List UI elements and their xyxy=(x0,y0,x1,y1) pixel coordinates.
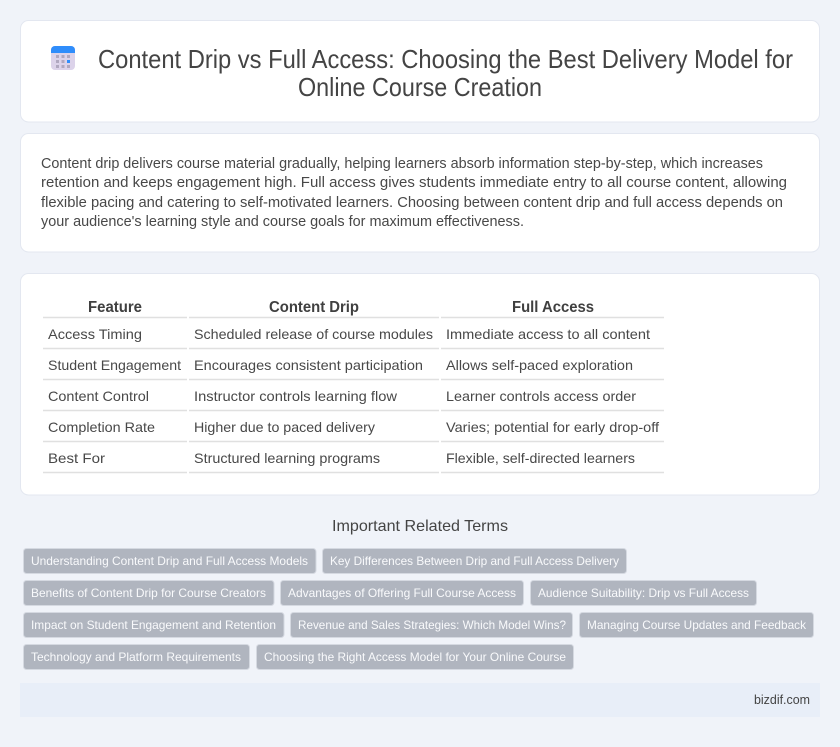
tag xyxy=(530,580,756,606)
row: student engagement: Allows self-paced exploration xyxy=(446,357,633,373)
row: access timing: Access Timing xyxy=(48,326,142,342)
tag: Choosing the Right Access Model for Your Online Course xyxy=(264,650,566,664)
tag xyxy=(322,548,626,574)
row: content control: Content Control xyxy=(48,388,149,404)
row: content control: Instructor controls learning flow xyxy=(194,388,398,404)
tag: Advantages of Offering Full Course Access xyxy=(288,586,516,600)
icon: calendar xyxy=(51,46,75,70)
tag: Revenue and Sales Strategies: Which Model Wins? xyxy=(298,618,566,632)
title: Online Course Creation xyxy=(298,74,542,102)
intro paragraph: retention and keeps engagement high. Full access gives students immediate entry to all course content, allowing xyxy=(41,175,787,191)
tag: Managing Course Updates and Feedback xyxy=(587,618,807,632)
row: best for: Structured learning programs xyxy=(194,450,380,466)
intro paragraph: flexible pacing and catering to self-motivated learners. Choosing between content drip and full access depends on xyxy=(41,195,783,211)
tag xyxy=(24,548,316,574)
tag: Key Differences Between Drip and Full Access Delivery xyxy=(330,554,619,568)
row: completion rate xyxy=(48,419,659,435)
related terms tags xyxy=(24,548,814,670)
row: student engagement: Encourages consistent participation xyxy=(194,357,423,373)
tag xyxy=(290,612,572,638)
tag xyxy=(24,580,274,606)
comparison table panel xyxy=(20,274,820,495)
row: completion rate: Varies; potential for early drop-off xyxy=(446,419,659,435)
title xyxy=(98,46,793,102)
tag xyxy=(280,580,524,606)
row: access timing: Scheduled release of course modules xyxy=(194,326,433,342)
row: student engagement xyxy=(48,357,633,373)
tag: Audience Suitability: Drip vs Full Access xyxy=(538,586,749,600)
tag: Benefits of Content Drip for Course Creators xyxy=(31,586,266,600)
tag: Technology and Platform Requirements xyxy=(31,650,241,664)
row: completion rate: Higher due to paced delivery xyxy=(194,419,375,435)
tag xyxy=(24,612,284,638)
row: content control: Learner controls access order xyxy=(446,388,636,404)
row: best for xyxy=(48,450,635,466)
row: best for: Best For xyxy=(48,450,105,466)
related terms heading: Important Related Terms xyxy=(332,518,508,535)
row: best for: Flexible, self-directed learners xyxy=(446,450,635,466)
tag: Understanding Content Drip and Full Access Models xyxy=(31,554,308,568)
tag xyxy=(24,644,250,670)
row: access timing xyxy=(48,326,650,342)
intro paragraph xyxy=(41,156,787,230)
intro text panel xyxy=(20,134,820,252)
intro paragraph: your audience's learning style and course goals for maximum effectiveness. xyxy=(41,214,524,230)
title: Content Drip vs Full Access: Choosing the Best Delivery Model for xyxy=(98,46,793,74)
row: content control xyxy=(48,388,636,404)
table header row: Content Drip xyxy=(269,299,359,316)
tag xyxy=(256,644,574,670)
tag: Impact on Student Engagement and Retention xyxy=(31,618,276,632)
table header row xyxy=(88,299,594,316)
footer source: bizdif.com xyxy=(754,692,810,707)
intro paragraph: Content drip delivers course material gradually, helping learners absorb information step-by-step, which increases xyxy=(41,156,763,172)
table header row: Feature xyxy=(88,299,142,316)
header panel xyxy=(20,20,820,122)
footer bar xyxy=(20,683,820,717)
table header row: Full Access xyxy=(512,299,594,316)
tag xyxy=(580,612,814,638)
row: completion rate: Completion Rate xyxy=(48,419,155,435)
row: access timing: Immediate access to all content xyxy=(446,326,650,342)
row: student engagement: Student Engagement xyxy=(48,357,181,373)
